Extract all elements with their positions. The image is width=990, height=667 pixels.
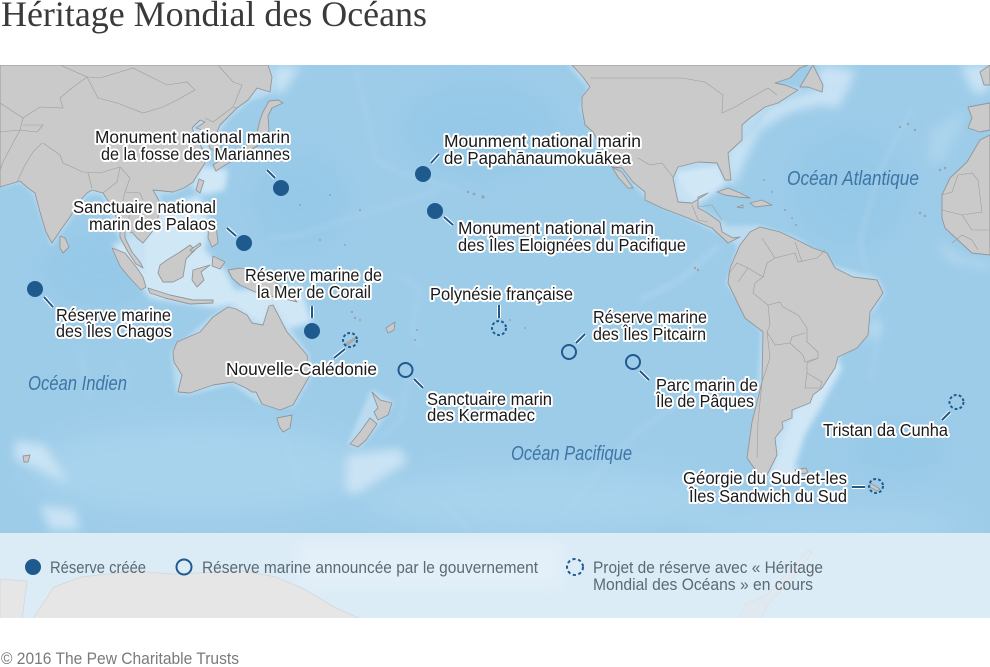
site: Ile de Paques: Parc marin de	[656, 375, 758, 395]
site: Palaos: Sanctuaire national	[73, 197, 216, 217]
New Zealand	[372, 392, 392, 420]
site: Mer de Corail: la Mer de Corail	[257, 282, 371, 302]
site: Mariannes	[95, 127, 290, 196]
site: Nouvelle-Caledonie: Nouvelle-Calédonie	[226, 359, 377, 379]
site: Ile de Paques: Île de Pâques	[655, 391, 754, 411]
site: Tristan da Cunha: Tristan da Cunha	[823, 420, 948, 440]
site: Polynesie francaise	[430, 284, 573, 335]
Philippines	[208, 229, 218, 248]
site: Chagos	[27, 281, 172, 341]
legend: created: Réserve créée	[50, 559, 146, 577]
legend: created	[25, 559, 146, 575]
site: Georgie du Sud: Îles Sandwich du Sud	[688, 486, 847, 506]
ocean label: Atlantic: Océan Atlantique	[787, 168, 919, 190]
site: Chagos: Réserve marine	[56, 305, 171, 325]
site: Mer de Corail	[245, 265, 382, 339]
North and Central America	[572, 65, 808, 243]
Falklands	[795, 468, 808, 474]
Africa	[942, 135, 990, 255]
country borders	[0, 65, 990, 458]
South Georgia	[870, 483, 880, 491]
Australia	[173, 305, 310, 410]
site: Tristan da Cunha	[823, 395, 964, 440]
site: Pitcairn	[562, 307, 707, 359]
site: Polynesie francaise: Polynésie française	[430, 284, 573, 304]
Tasmania	[277, 415, 292, 432]
Taiwan	[196, 179, 204, 193]
Solomon and Vanuatu specks	[386, 322, 395, 333]
Borneo	[158, 245, 195, 282]
site: Palaos: marin des Palaos	[89, 214, 216, 234]
Sumatra	[112, 248, 146, 290]
site: Georgie du Sud: Géorgie du Sud-et-les	[683, 468, 847, 488]
New Guinea	[228, 268, 297, 302]
site: Kermadec	[398, 363, 552, 425]
legend: project	[567, 559, 823, 594]
site: Kermadec: des Kermadec	[427, 405, 535, 425]
site: Iles Eloignees	[427, 203, 686, 255]
island specks	[299, 123, 946, 341]
site: Mer de Corail: Réserve marine de	[245, 265, 382, 285]
ocean label: Pacific: Océan Pacifique	[511, 443, 632, 465]
Asia	[0, 65, 272, 268]
legend panel	[0, 533, 990, 620]
Baja California	[612, 167, 633, 188]
site: Chagos: des Îles Chagos	[56, 321, 172, 341]
coastal halo	[0, 65, 883, 475]
site: Papahanaumokuakea	[415, 131, 641, 182]
site: Pitcairn: des Îles Pitcairn	[593, 324, 706, 344]
Southeast Asian shelf	[112, 163, 842, 480]
South America	[728, 227, 883, 475]
legend: project: Projet de réserve avec « Héritage	[593, 559, 823, 577]
site: Kermadec: Sanctuaire marin	[427, 389, 552, 409]
ocean shelves	[15, 65, 990, 530]
site: Mariannes: Monument national marin	[95, 127, 290, 147]
ridges	[80, 67, 912, 530]
site: Papahanaumokuakea: Mounment national marin	[444, 131, 641, 151]
Java and Lesser Sunda	[148, 288, 213, 304]
British Isles	[980, 65, 990, 85]
Cuba	[717, 188, 750, 198]
Hispaniola	[750, 200, 772, 207]
Sulawesi	[192, 265, 210, 287]
ocean label: Indian: Océan Indien	[28, 373, 127, 395]
site: Nouvelle-Caledonie	[226, 333, 377, 379]
site: Ile de Paques	[626, 355, 758, 411]
site: Pitcairn: Réserve marine	[593, 307, 707, 327]
Kerguelen	[23, 455, 30, 462]
legend: announced: Réserve marine announcée par le gouvernement	[202, 559, 538, 577]
Iberia	[968, 103, 990, 132]
Japan	[213, 100, 283, 171]
site: Mariannes: de la fosse des Mariannes	[101, 144, 290, 164]
site: Georgie du Sud	[683, 468, 883, 506]
site: Papahanaumokuakea: de Papahānaumokuākea	[444, 148, 631, 168]
site: Iles Eloignees: des Îles Eloignées du Pacifique	[458, 235, 686, 255]
Jamaica	[737, 205, 743, 208]
site: Palaos	[73, 197, 252, 251]
Sri Lanka	[60, 236, 69, 253]
Antarctica land	[0, 550, 812, 620]
map panel	[0, 65, 990, 540]
land masses	[0, 65, 990, 491]
legend: project: Mondial des Océans » en cours	[593, 576, 813, 594]
Newfoundland	[800, 65, 823, 92]
site: Iles Eloignees: Monument national marin	[458, 218, 654, 238]
